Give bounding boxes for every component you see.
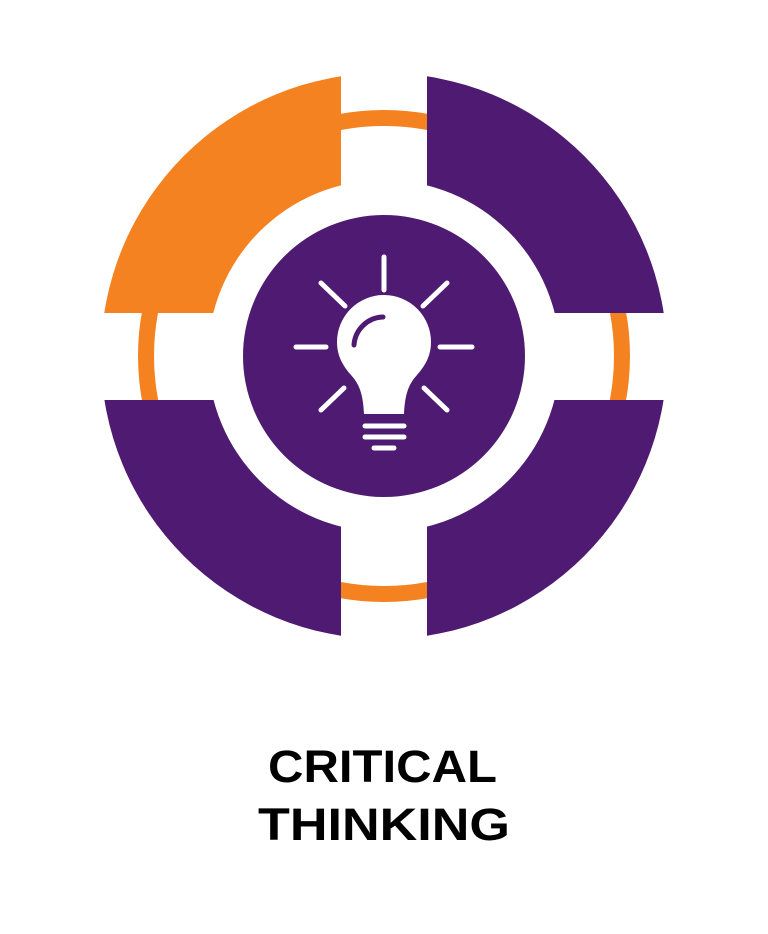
segment: top-left orange — [104, 76, 341, 313]
title: THINKING — [258, 799, 510, 850]
orange ring — [146, 118, 622, 594]
segment: bottom-left purple — [104, 400, 341, 636]
segment: bottom-right purple — [427, 400, 664, 636]
title — [258, 741, 510, 850]
icon: lightbulb — [296, 257, 472, 448]
title: CRITICAL — [268, 741, 497, 792]
segment: top-right purple — [427, 76, 664, 313]
center purple circle — [243, 215, 525, 497]
